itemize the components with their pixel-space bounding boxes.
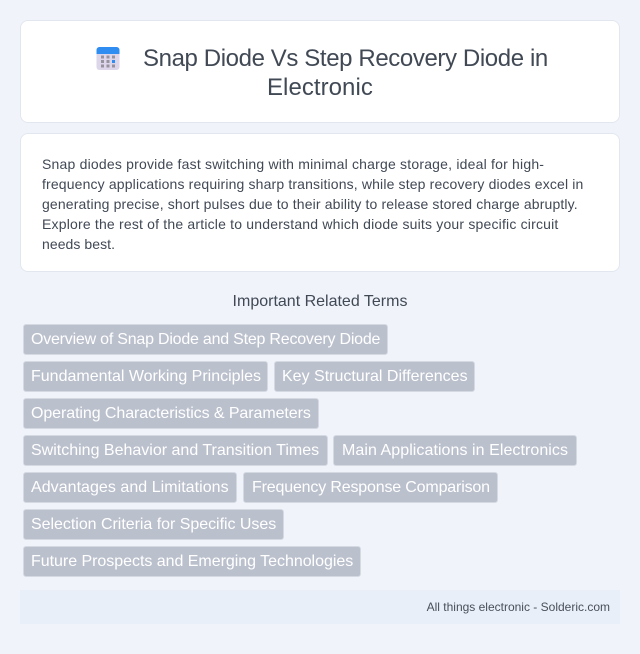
tag	[23, 435, 328, 466]
tag	[23, 509, 284, 540]
tag	[23, 398, 319, 429]
title: Snap Diode Vs Step Recovery Diode in	[143, 45, 548, 72]
tag	[23, 472, 237, 503]
tag	[23, 361, 268, 392]
title	[143, 45, 548, 101]
icon: calendar	[96, 47, 120, 70]
tag: Future Prospects and Emerging Technologies	[31, 553, 353, 570]
footer: All things electronic - Solderic.com	[427, 600, 610, 614]
tag: Fundamental Working Principles	[31, 368, 261, 385]
title: Electronic	[267, 74, 373, 101]
tag: Switching Behavior and Transition Times	[31, 442, 319, 459]
tag	[23, 324, 388, 355]
footer	[20, 590, 620, 624]
tag	[274, 361, 475, 392]
tag	[23, 546, 361, 577]
description text	[42, 156, 583, 252]
heading: related terms: Important Related Terms	[233, 293, 407, 310]
tag	[333, 435, 577, 466]
tag: Overview of Snap Diode and Step Recovery Diode	[31, 331, 380, 348]
title card	[20, 20, 620, 123]
description text: frequency applications requiring sharp transitions, while step recovery diodes excel in	[42, 176, 583, 192]
description text: Explore the rest of the article to understand which diode suits your specific circuit	[42, 216, 559, 232]
tag: Key Structural Differences	[282, 368, 468, 385]
tag: Advantages and Limitations	[31, 479, 229, 496]
tag	[243, 472, 498, 503]
description text: needs best.	[42, 236, 115, 252]
tag: Operating Characteristics & Parameters	[31, 405, 311, 422]
description text: generating precise, short pulses due to their ability to release stored charge abruptly.	[42, 196, 578, 212]
tag: Frequency Response Comparison	[252, 479, 490, 496]
tag list	[23, 324, 577, 577]
tag: Main Applications in Electronics	[342, 442, 568, 459]
tag: Selection Criteria for Specific Uses	[31, 516, 276, 533]
description text: Snap diodes provide fast switching with minimal charge storage, ideal for high-	[42, 156, 544, 172]
description card	[20, 133, 620, 272]
